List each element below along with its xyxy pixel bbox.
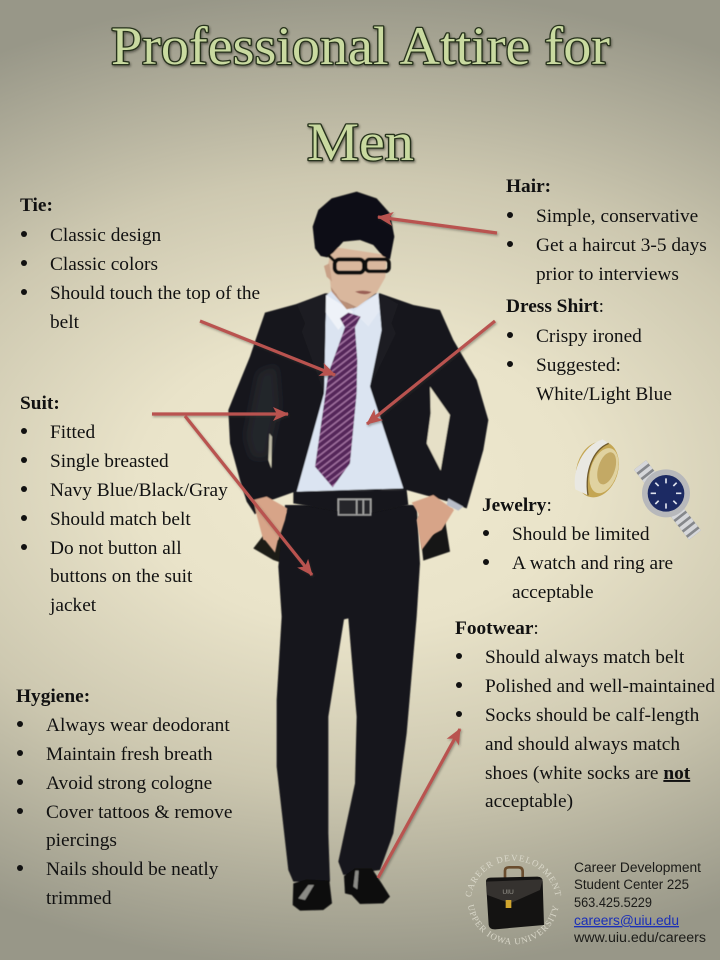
list: hygiene: Nails should be neatly (46, 859, 219, 880)
list: hygiene: Maintain fresh breath (46, 744, 213, 765)
list: suit: buttons on the suit (50, 566, 193, 587)
list: dress shirt: Crispy ironed (536, 326, 642, 347)
panel: footwear (455, 618, 715, 812)
list: suit: Single breasted (50, 451, 169, 472)
arrow: tie (200, 321, 335, 375)
seal ring text (466, 854, 562, 944)
contact details: Career Development (574, 860, 701, 875)
list: hygiene: piercings (46, 830, 117, 851)
arrow: footwear (378, 729, 460, 878)
title: Professional Attire for (111, 16, 610, 76)
list: dress shirt: White/Light Blue (536, 384, 672, 405)
list: tie (21, 225, 260, 333)
heading: footwear: Footwear: (455, 618, 539, 639)
arrow: suit trousers (185, 416, 312, 575)
contact details (573, 860, 706, 945)
list: suit: Fitted (50, 422, 95, 443)
list: hair: Get a haircut 3-5 days (536, 235, 707, 256)
logo: career development seal (466, 854, 562, 944)
panel: tie (20, 195, 260, 333)
list: footwear: Polished and well-maintained (485, 676, 715, 697)
list: hygiene: Avoid strong cologne (46, 773, 212, 794)
list: jewelry: A watch and ring are (512, 553, 673, 574)
list: footwear: acceptable) (485, 791, 573, 812)
list: jewelry: acceptable (512, 582, 594, 603)
icon: ring (569, 436, 626, 503)
list: hair (507, 206, 707, 285)
list: footwear: Socks should be calf-length (485, 705, 700, 726)
arrow: suit jacket (152, 412, 288, 416)
list: suit (21, 422, 228, 616)
list: jewelry (483, 524, 673, 603)
list: tie: Classic design (50, 225, 162, 246)
list: footwear: shoes (white socks are not (485, 763, 691, 784)
list: suit: Do not button all (50, 538, 182, 559)
heading: suit: Suit: (20, 393, 60, 414)
arrow: hair (378, 217, 497, 233)
seal ring text: UPPER IOWA UNIVERSITY (468, 904, 558, 944)
jacket flaps and trousers (253, 505, 450, 911)
contact details: Student Center 225 (574, 877, 689, 892)
list: dress shirt: Suggested: (536, 355, 621, 376)
contact details: careers@uiu.edu (574, 913, 679, 928)
heading: tie: Tie: (20, 195, 53, 216)
list: tie: belt (50, 312, 80, 333)
heading: hygiene: Hygiene: (16, 686, 90, 707)
list: footwear: Should always match belt (485, 647, 685, 668)
list: hair: prior to interviews (536, 264, 679, 285)
list: hygiene: Always wear deodorant (46, 715, 230, 736)
contact details: www.uiu.edu/careers (573, 930, 706, 945)
list: jewelry: Should be limited (512, 524, 650, 545)
panel: dress shirt (506, 296, 672, 405)
list: suit: Navy Blue/Black/Gray (50, 480, 228, 501)
list: hair: Simple, conservative (536, 206, 698, 227)
title: Men (307, 112, 414, 172)
jacket, shirt, tie and head (228, 192, 488, 541)
panel: jewelry (482, 495, 673, 603)
heading: jewelry: Jewelry: (482, 495, 552, 516)
figure: man in suit (228, 192, 488, 911)
heading: dress shirt: Dress Shirt: (506, 296, 604, 317)
list: footwear (456, 647, 715, 812)
list: suit: jacket (49, 595, 97, 616)
list: tie: Classic colors (50, 254, 158, 275)
seal ring text: CAREER DEVELOPMENT (466, 854, 562, 897)
panel: hygiene (16, 686, 232, 909)
heading: hair: Hair: (506, 176, 551, 197)
list: hygiene: Cover tattoos & remove (46, 802, 232, 823)
list: hygiene: trimmed (46, 888, 112, 909)
list: suit: Should match belt (50, 509, 191, 530)
list: footwear: and should always match (485, 734, 680, 755)
arrow: dress shirt (367, 321, 495, 424)
list: tie: Should touch the top of the (50, 283, 260, 304)
panel: suit (20, 393, 228, 616)
list: dress shirt (507, 326, 672, 405)
lower hands (260, 507, 453, 553)
panel: hair (506, 176, 707, 285)
title (111, 16, 610, 172)
icon: watch (640, 465, 695, 535)
contact details: 563.425.5229 (574, 895, 652, 910)
icon: briefcase: UIU (502, 889, 514, 896)
list: hygiene (17, 715, 232, 909)
